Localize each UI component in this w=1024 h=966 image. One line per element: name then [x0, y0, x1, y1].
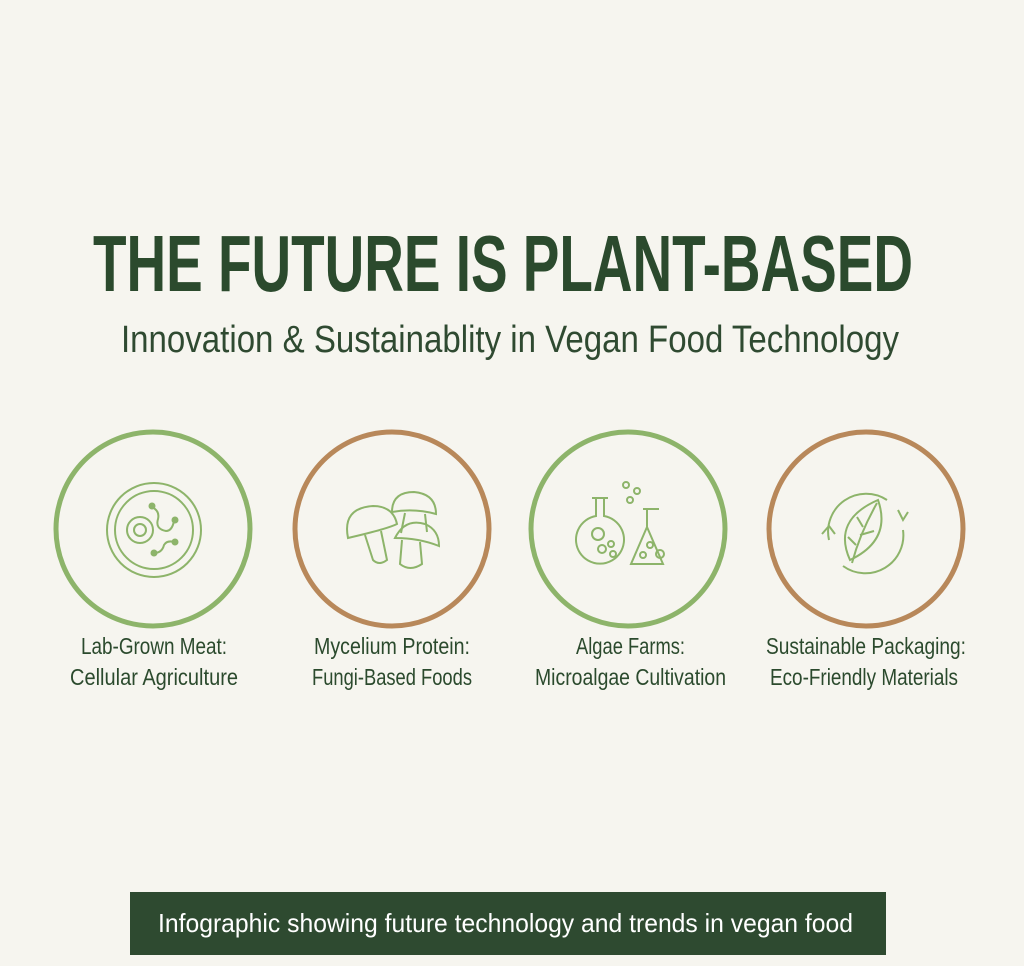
label: algae: Microalgae Cultivation [535, 664, 726, 690]
label: lab-grown meat: Lab-Grown Meat: [81, 633, 227, 659]
icon: petri dish with cells [107, 483, 201, 577]
label: packaging: Eco-Friendly Materials [770, 664, 958, 690]
icon: leaf with recycle arrows [822, 494, 908, 573]
panel: mycelium protein [295, 432, 489, 690]
panel: lab-grown meat [56, 432, 250, 690]
label: mycelium: Mycelium Protein: [314, 633, 470, 659]
icon ring: mycelium [295, 432, 489, 626]
footer banner [130, 892, 886, 955]
panel: algae farms [531, 432, 726, 690]
icon: mushrooms [347, 492, 439, 568]
subtitle: Innovation & Sustainablity in Vegan Food Technology [121, 319, 899, 361]
icon ring: algae [531, 432, 725, 626]
icon ring: lab-grown meat [56, 432, 250, 626]
label: algae: Algae Farms: [576, 633, 685, 659]
footer banner: Infographic showing future technology and trends in vegan food [158, 908, 853, 938]
label: algae [535, 633, 726, 690]
icon: flasks with bubbles [576, 482, 664, 564]
label: packaging [766, 633, 966, 690]
icon ring: packaging [769, 432, 963, 626]
label: lab-grown meat [70, 633, 238, 690]
panel: sustainable packaging [766, 432, 966, 690]
label: packaging: Sustainable Packaging: [766, 633, 966, 659]
label: mycelium: Fungi-Based Foods [312, 664, 472, 690]
label: lab-grown meat: Cellular Agriculture [70, 664, 238, 690]
label: mycelium [312, 633, 472, 690]
